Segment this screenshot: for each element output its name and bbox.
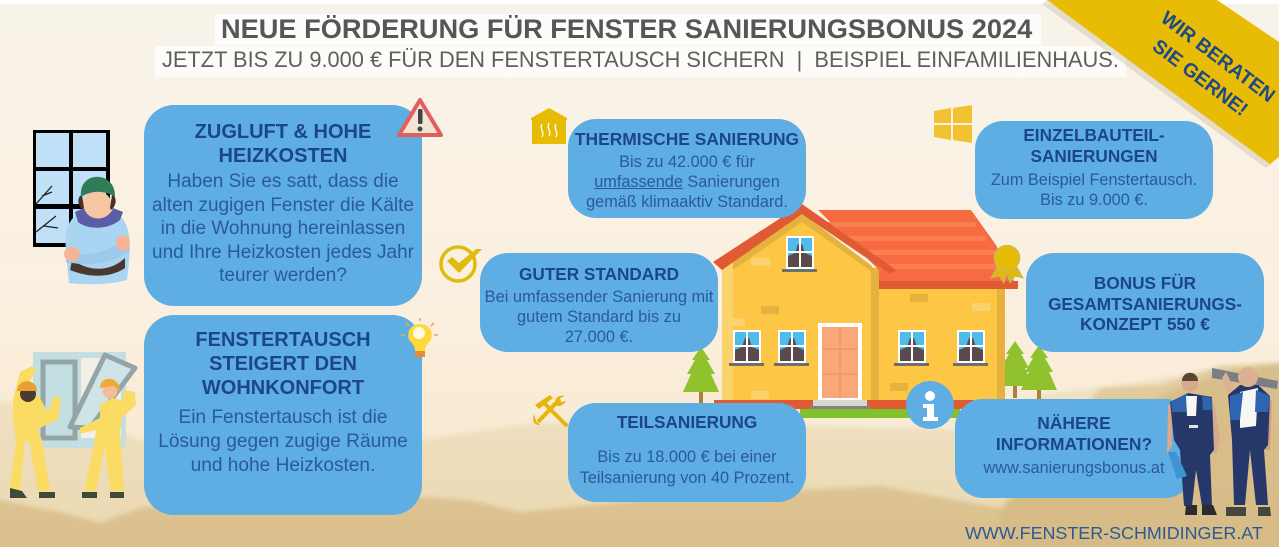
- heading: [195, 121, 371, 167]
- heading: INFORMATIONEN?: [996, 434, 1152, 454]
- windows: [729, 236, 988, 366]
- illustration: freezing person at window: [33, 130, 130, 284]
- heading: TEILSANIERUNG: [617, 412, 757, 432]
- base: [714, 400, 974, 418]
- craftsman left: [1167, 373, 1220, 515]
- icon: warning triangle: [397, 98, 444, 137]
- icon: house with heat waves: [531, 108, 567, 144]
- heading: GUTER STANDARD: [519, 264, 679, 284]
- heading: WOHNKONFORT: [202, 377, 364, 399]
- panel: Teilsanierung: [568, 403, 806, 502]
- heading: [195, 329, 371, 399]
- text: Teilsanierung von 40 Prozent.: [580, 468, 794, 486]
- text: Ein Fenstertausch ist die: [178, 407, 388, 428]
- heading: GESAMTSANIERUNGS-: [1048, 294, 1242, 314]
- icon: award medal: [990, 244, 1024, 284]
- text: Bis zu 42.000 € für: [619, 153, 755, 171]
- trees: [683, 341, 1057, 404]
- text: Bei umfassender Sanierung mit: [485, 288, 713, 306]
- heading: ZUGLUFT & HOHE: [195, 121, 371, 143]
- heading: BONUS FÜR: [1094, 273, 1196, 293]
- text: Zum Beispiel Fenstertausch.: [991, 171, 1197, 189]
- icon: info: [906, 381, 954, 429]
- door: [810, 323, 870, 409]
- heading: KONZEPT 550 €: [1080, 314, 1210, 334]
- icon: window logo: [934, 105, 972, 143]
- ribbon: Wir beraten Sie gerne: WIR BERATEN: [1156, 7, 1279, 107]
- ribbon: Wir beraten Sie gerne: SIE GERNE!: [1148, 35, 1252, 121]
- panel: Fenstertausch steigert den Wohnkonfort: [144, 315, 422, 515]
- heading: [1023, 125, 1165, 166]
- heading: STEIGERT DEN: [209, 353, 357, 375]
- heading: HEIZKOSTEN: [219, 145, 347, 167]
- heading: NÄHERE: [1037, 413, 1111, 433]
- text: [586, 153, 788, 211]
- panel: Zugluft & hohe Heizkosten: [144, 105, 422, 306]
- panel: Guter Standard: [480, 253, 718, 352]
- text: [580, 448, 794, 486]
- text: Haben Sie es satt, dass die: [167, 171, 399, 192]
- roof: [713, 204, 1018, 289]
- heading: EINZELBAUTEIL-: [1023, 125, 1165, 145]
- website url: WWW.FENSTER-SCHMIDINGER.AT: [965, 523, 1263, 543]
- text: Bis zu 9.000 €.: [1040, 191, 1148, 209]
- title: NEUE FÖRDERUNG FÜR FENSTER SANIERUNGSBONUS 2024: [221, 13, 1032, 44]
- heading: [996, 413, 1152, 454]
- text: [158, 407, 408, 476]
- photo: two craftsmen: [1167, 367, 1278, 516]
- heading: FENSTERTAUSCH: [195, 329, 371, 351]
- ribbon: Wir beraten Sie gerne: [1042, 0, 1279, 168]
- text: gutem Standard bis zu: [517, 308, 681, 326]
- text: und hohe Heizkosten.: [191, 455, 375, 476]
- icon: light bulb: [401, 318, 438, 357]
- text: in die Wohnung hereinlassen: [161, 218, 405, 239]
- text: www.sanierungsbonus.at: [983, 459, 1164, 477]
- craftsman right: [1212, 367, 1278, 516]
- text: und Ihre Heizkosten jedes Jahr: [152, 242, 414, 262]
- panel: Nähere Informationen: [955, 399, 1193, 498]
- illustration: house: [683, 204, 1057, 418]
- text: alten zugigen Fenster die Kälte: [152, 194, 414, 216]
- text: teurer werden?: [219, 265, 347, 286]
- text: [991, 171, 1197, 209]
- icon: tools: [533, 395, 568, 428]
- heading: SANIERUNGEN: [1030, 146, 1158, 166]
- walls: [722, 213, 1005, 400]
- heading: [1048, 273, 1242, 334]
- title highlight bands: [155, 14, 1126, 77]
- text: Lösung gegen zugige Räume: [158, 431, 408, 452]
- text: [152, 171, 414, 286]
- text: umfassende Sanierungen: [594, 173, 780, 191]
- panel: Bonus für Gesamtsanierungskonzept: [1026, 253, 1264, 352]
- heading: THERMISCHE SANIERUNG: [575, 129, 799, 149]
- subtitle: JETZT BIS ZU 9.000 € FÜR DEN FENSTERTAUSCH SICHERN | BEISPIEL EINFAMILIENHAUS.: [162, 47, 1119, 72]
- icon: check mark: [439, 245, 482, 283]
- illustration: workers installing window: [10, 352, 138, 498]
- panel: Thermische Sanierung: [568, 119, 806, 218]
- text: 27.000 €.: [565, 328, 633, 346]
- text: [485, 288, 714, 346]
- text: Bis zu 18.000 € bei einer: [597, 448, 777, 466]
- panel: Einzelbauteil-Sanierungen: [975, 121, 1213, 219]
- text: gemäß klimaaktiv Standard.: [586, 193, 788, 211]
